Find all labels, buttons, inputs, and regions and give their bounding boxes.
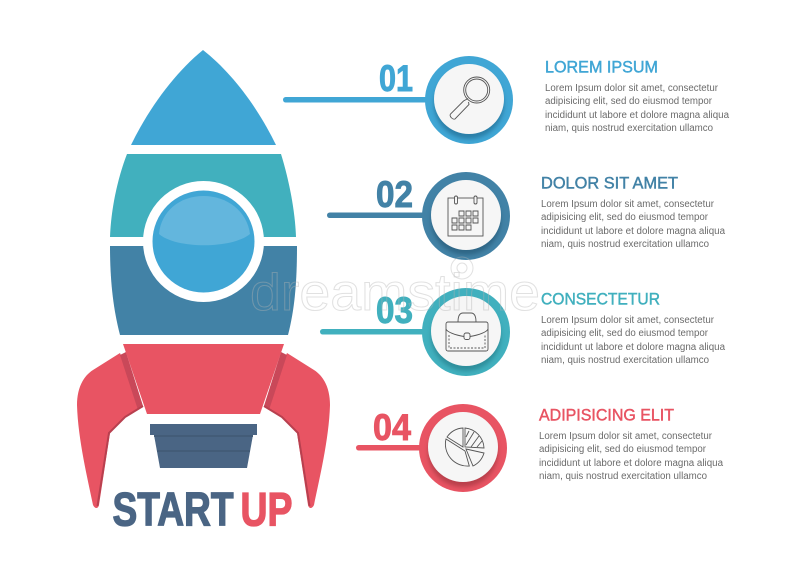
body text 02: incididunt ut labore et dolore magna aliqua — [541, 226, 725, 237]
rocket window — [143, 181, 264, 302]
rocket nose — [131, 50, 276, 145]
rocket upper body — [110, 154, 296, 237]
connector line 02 — [327, 212, 430, 218]
right fin — [264, 352, 330, 508]
heading 04: ADIPISICING ELIT — [539, 406, 674, 424]
start up label: UP — [240, 482, 292, 536]
circle 03 — [422, 288, 510, 376]
body text 04: adipisicing elit, sed do eiusmod tempor — [539, 444, 707, 455]
circle 01 — [425, 56, 513, 144]
body text 04: incididunt ut labore et dolore magna aliqua — [539, 458, 723, 469]
icon: pie chart — [445, 428, 484, 466]
body text 01: adipisicing elit, sed do eiusmod tempor — [545, 96, 713, 107]
connector line 01 — [283, 97, 433, 102]
step 04 — [356, 404, 723, 492]
rocket engine — [150, 424, 257, 468]
icon: briefcase — [446, 313, 488, 351]
body text 01 — [545, 83, 729, 134]
watermark: dreamstime — [250, 264, 540, 322]
heading 02: DOLOR SIT AMET — [541, 174, 678, 192]
number 04: 04 — [373, 407, 411, 448]
connector line 03 — [320, 329, 430, 334]
body text 03 — [541, 315, 725, 366]
circle 02 — [422, 172, 510, 260]
rocket lower body — [110, 246, 297, 335]
body text 02: Lorem Ipsum dolor sit amet, consectetur — [541, 199, 715, 210]
step 02 — [327, 172, 725, 260]
body text 04: niam, quis nostrud exercitation ullamco — [539, 471, 707, 482]
rocket illustration — [77, 50, 330, 508]
step 03 — [320, 288, 725, 376]
rocket base — [123, 344, 284, 414]
icon: calendar — [448, 196, 483, 236]
icon: magnifying glass — [450, 77, 490, 119]
step 01 — [283, 56, 729, 144]
body text 01: niam, quis nostrud exercitation ullamco — [545, 123, 713, 134]
circle 04 — [419, 404, 507, 492]
body text 04: Lorem Ipsum dolor sit amet, consectetur — [539, 431, 713, 442]
number 02: 02 — [376, 174, 413, 215]
heading 01: LOREM IPSUM — [545, 58, 658, 76]
body text 01: Lorem Ipsum dolor sit amet, consectetur — [545, 83, 719, 94]
number 01: 01 — [379, 58, 413, 99]
left fin — [77, 352, 143, 508]
body text 01: incididunt ut labore et dolore magna aliqua — [545, 110, 729, 121]
number 03: 03 — [376, 290, 413, 331]
connector line 04 — [356, 445, 426, 450]
body text 02: niam, quis nostrud exercitation ullamco — [541, 239, 709, 250]
body text 03: incididunt ut labore et dolore magna aliqua — [541, 342, 725, 353]
heading 03: CONSECTETUR — [541, 290, 660, 308]
body text 03: adipisicing elit, sed do eiusmod tempor — [541, 328, 709, 339]
start up label: START — [112, 482, 234, 536]
body text 02: adipisicing elit, sed do eiusmod tempor — [541, 212, 709, 223]
body text 03: Lorem Ipsum dolor sit amet, consectetur — [541, 315, 715, 326]
body text 02 — [541, 199, 725, 250]
body text 04 — [539, 431, 723, 482]
body text 03: niam, quis nostrud exercitation ullamco — [541, 355, 709, 366]
